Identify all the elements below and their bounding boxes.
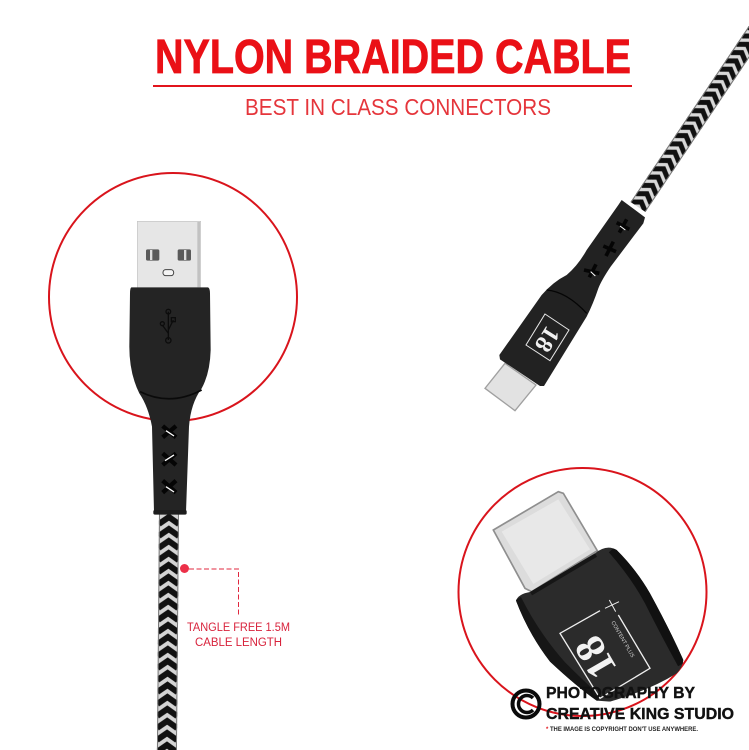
watermark: CREATIVE KING STUDIO — [546, 706, 734, 723]
watermark text: PHOTOGRAPHY BY — [546, 685, 695, 702]
copyright symbol — [512, 690, 540, 718]
highlight circle: Type-C connector — [458, 468, 706, 716]
brand label: 18 — [529, 321, 565, 357]
subtitle: BEST IN CLASS CONNECTORS — [245, 94, 551, 120]
watermark — [512, 685, 734, 733]
USB connector — [129, 221, 211, 515]
metal plug — [137, 221, 201, 288]
metal tip — [493, 492, 597, 592]
connector body — [516, 548, 684, 702]
label number: 18 — [565, 628, 625, 687]
callout dashed line — [189, 569, 238, 617]
callout text — [187, 622, 290, 649]
overmould body — [129, 287, 211, 512]
plug hole right — [178, 249, 191, 261]
callout text: CABLE LENGTH — [195, 637, 282, 649]
label cross mark — [605, 600, 619, 612]
Type-C zoomed connector — [492, 490, 684, 702]
braided cable: right — [631, 3, 749, 212]
USB symbol — [160, 309, 175, 343]
callout text: TANGLE FREE 1.5M — [187, 622, 290, 634]
metal tip — [485, 363, 536, 411]
body shading — [140, 390, 202, 399]
callout: cable length — [180, 564, 290, 649]
strain relief marks — [163, 426, 176, 493]
brand label — [560, 600, 650, 698]
highlight circle: USB connector — [49, 173, 297, 421]
label small text: CONTENT PLUS — [609, 620, 635, 659]
braided cable: left — [157, 512, 179, 750]
connector body — [499, 200, 645, 386]
Type-C cable connector — [485, 200, 645, 411]
plug hole left — [146, 249, 159, 261]
brand label — [526, 314, 569, 361]
strain relief marks — [584, 219, 629, 277]
title: NYLON BRAIDED CABLE — [155, 31, 631, 84]
cable collar — [153, 510, 187, 515]
body seam — [547, 290, 587, 313]
callout dot — [180, 564, 189, 573]
plug slot — [163, 270, 174, 276]
copyright notice: * THE IMAGE IS COPYRIGHT DON'T USE ANYWHERE. — [546, 726, 698, 733]
